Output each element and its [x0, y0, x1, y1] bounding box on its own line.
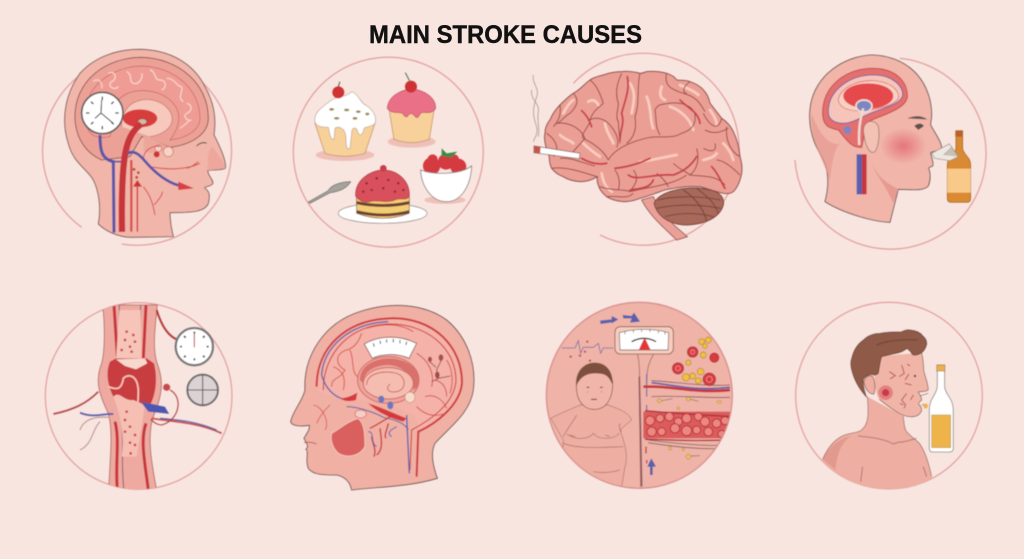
- ventricle ovals: [378, 396, 393, 409]
- mouth cavity: [331, 418, 365, 456]
- title: MAIN STROKE CAUSES: [369, 21, 642, 49]
- broken capillaries: [889, 364, 913, 408]
- panel: head with bottle (alcohol): [795, 55, 986, 249]
- artery layers: [643, 381, 733, 449]
- neck vessels: [857, 154, 867, 194]
- icon: bottle with rag: [932, 131, 971, 202]
- icon: white bottle: [923, 365, 953, 452]
- panel: smoking and the brain: [531, 53, 742, 245]
- icon: spoon: [308, 182, 351, 203]
- man torso: [551, 363, 632, 487]
- panel: artery blockage with gauges: [45, 303, 232, 490]
- panel: head with clock (high blood pressure): [43, 49, 232, 245]
- fat and blood cells: [672, 337, 719, 386]
- catheter: [151, 390, 178, 425]
- brain cross-section: [823, 68, 907, 147]
- ear: [863, 121, 879, 152]
- hair: [851, 330, 927, 397]
- infographic canvas: [41, 25, 988, 492]
- brain: [544, 71, 742, 202]
- midbrain rings: [358, 357, 419, 403]
- face: [851, 330, 928, 417]
- icon: cream cupcake: [315, 82, 376, 161]
- panel: man with flushed skin and bottle: [796, 302, 982, 493]
- blue clamp: [141, 402, 169, 414]
- ear: [864, 376, 875, 394]
- arrows: [600, 313, 656, 475]
- nodes: [428, 354, 443, 378]
- artery: [98, 305, 161, 490]
- icon: clock: [82, 92, 123, 134]
- pulse line: [562, 341, 613, 353]
- panel: head cross-section with scale: [291, 305, 474, 490]
- icon: pressure gauge: [176, 328, 213, 365]
- icon: strawberry bowl: [421, 148, 472, 204]
- brain folds: [332, 325, 452, 415]
- icon: cerebellum and brainstem: [642, 188, 724, 240]
- vessels: [157, 310, 178, 340]
- icon: layered cake on plate: [338, 165, 427, 223]
- eye: [908, 117, 927, 129]
- icon: dial scale: [615, 327, 673, 354]
- icon: artery bulge: [340, 393, 407, 422]
- icon: scale gauge: [364, 337, 417, 358]
- vessels around the brain: [317, 318, 462, 477]
- panel: sugary foods: [293, 57, 483, 247]
- icon: cigarette: [534, 146, 580, 159]
- shoulders: [823, 397, 932, 493]
- icon: crosshair dial: [187, 375, 218, 405]
- smoke: [531, 75, 539, 142]
- scale column: [637, 353, 654, 487]
- panel: obesity with scale: [546, 302, 733, 488]
- icon: pink cupcake: [387, 73, 436, 148]
